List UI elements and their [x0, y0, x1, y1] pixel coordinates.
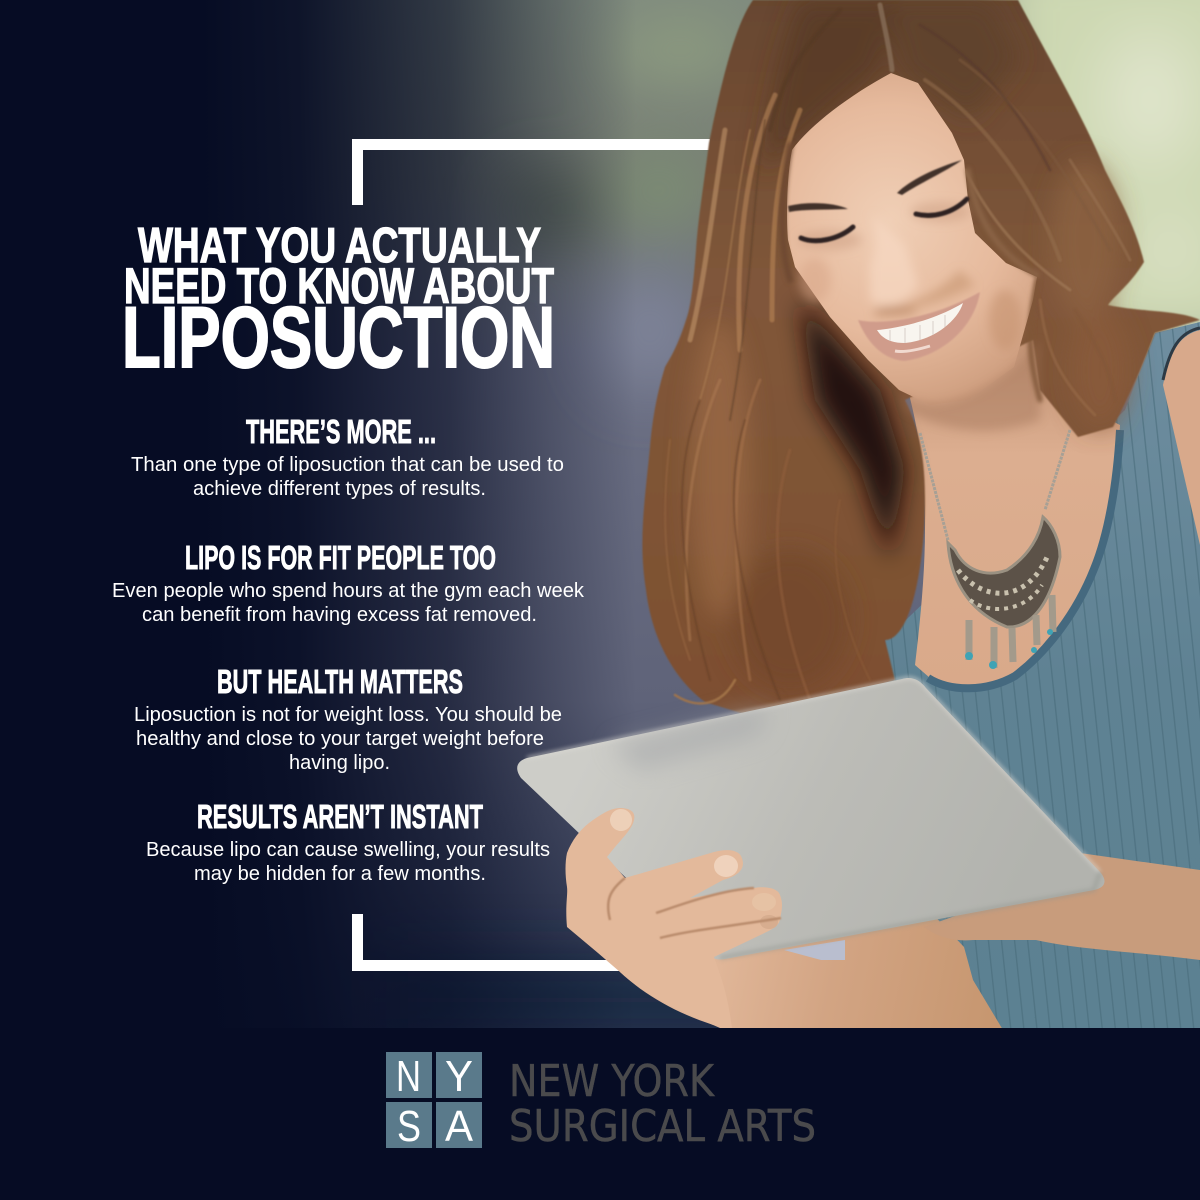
smile — [858, 292, 980, 361]
body text: may be hidden for a few months. — [194, 863, 486, 885]
body text — [134, 704, 562, 774]
nail: index finger — [714, 855, 738, 877]
right eyebrow — [897, 160, 962, 195]
chin shadow — [900, 340, 1040, 431]
finger creases — [608, 878, 781, 938]
heading: LIPO IS FOR FIT PEOPLE TOO — [185, 539, 496, 576]
logo wordmark: SURGICAL ARTS — [509, 1101, 816, 1152]
logo: NYSA tiles — [386, 1052, 482, 1151]
logo wordmark: NEW YORK — [509, 1056, 715, 1107]
white frame bracket: top — [352, 139, 710, 205]
title — [122, 219, 555, 386]
eyes — [801, 199, 967, 241]
title: LIPOSUCTION — [122, 290, 555, 386]
title: WHAT YOU ACTUALLY — [138, 219, 541, 273]
body text — [146, 839, 550, 885]
front hair strands beside the face — [782, 145, 1040, 400]
tank top — [885, 322, 1200, 1030]
gap between arm and tablet — [784, 940, 845, 960]
strap edge — [1163, 328, 1200, 380]
heading: RESULTS AREN’T INSTANT — [197, 798, 483, 835]
right arm — [924, 853, 1200, 960]
white frame bracket: bottom — [352, 914, 640, 971]
body text: healthy and close to your target weight before — [136, 728, 544, 750]
neckline lace trim — [928, 430, 1120, 688]
body text — [131, 454, 564, 500]
section: but health matters — [134, 663, 562, 774]
section: there's more — [131, 413, 564, 500]
logo: NYSA tiles: N — [396, 1052, 421, 1101]
nail: ring finger — [760, 915, 778, 929]
left forearm under tablet — [620, 905, 1003, 1030]
nail: middle finger — [752, 893, 776, 911]
body text — [112, 580, 585, 626]
logo: NYSA tiles: S — [397, 1102, 421, 1151]
logo wordmark — [509, 1056, 816, 1152]
hand holding tablet — [566, 805, 782, 1028]
tablet — [517, 678, 1105, 960]
body text: can benefit from having excess fat removed. — [142, 604, 537, 626]
thumb nail — [606, 805, 636, 835]
body text: Liposuction is not for weight loss. You should be — [134, 704, 562, 726]
body text: Than one type of liposuction that can be used to — [131, 454, 564, 476]
title: NEED TO KNOW ABOUT — [124, 258, 554, 314]
heading: THERE’S MORE ... — [246, 413, 436, 450]
body text: having lipo. — [289, 752, 390, 774]
section: results aren't instant — [146, 798, 550, 885]
photo: woman reading a tablet — [517, 0, 1200, 1030]
eyebrows — [788, 203, 848, 212]
necklace — [920, 430, 1070, 669]
hair mass — [642, 0, 1200, 722]
face — [787, 73, 1040, 431]
cheek and nose shading — [798, 202, 1021, 350]
logo: NYSA tiles: Y — [445, 1052, 473, 1101]
logo: NYSA tiles: A — [445, 1102, 474, 1151]
chest and neck skin — [905, 300, 1120, 687]
heading: BUT HEALTH MATTERS — [217, 663, 463, 700]
body text: achieve different types of results. — [193, 478, 486, 500]
section: lipo is for fit people too — [112, 539, 585, 626]
shoulder skin — [1163, 330, 1200, 545]
footer band — [0, 1028, 1200, 1200]
body text: Even people who spend hours at the gym each week — [112, 580, 585, 602]
body text: Because lipo can cause swelling, your results — [146, 839, 550, 861]
